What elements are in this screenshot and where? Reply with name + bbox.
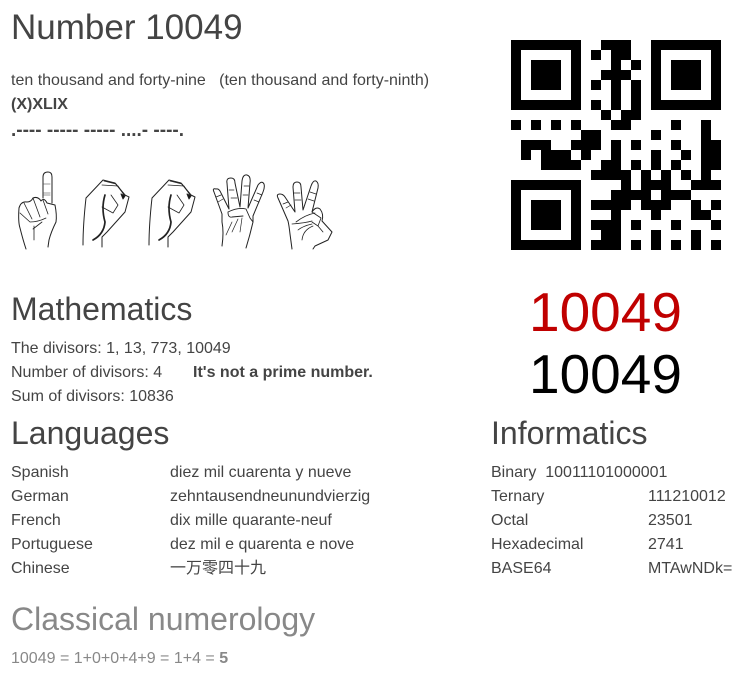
row: Ternary: 111210012 xyxy=(648,488,726,505)
text: sum of divisors: Sum of divisors: 10836 xyxy=(11,388,174,405)
row: Spanish xyxy=(11,464,351,481)
black number: 10049 xyxy=(529,343,682,405)
row: Hexadecimal: 2741 xyxy=(648,536,684,553)
row: French: French xyxy=(11,512,61,529)
row: German xyxy=(11,488,370,505)
row: Binary: Binary 10011101000001 xyxy=(491,464,667,481)
QR finder bottom-left xyxy=(511,180,581,250)
row: Octal: 23501 xyxy=(648,512,692,529)
icon: sign language hands xyxy=(18,172,332,250)
icon: hand digit 3 xyxy=(277,181,332,249)
row: Octal: Octal xyxy=(491,512,528,529)
roman numeral: (X)XLIX xyxy=(11,96,68,113)
row: Chinese: 一万零四十九 xyxy=(170,560,266,577)
icon: hand digit 4 xyxy=(213,175,264,248)
row: BASE64: BASE64 xyxy=(491,560,551,577)
QR code xyxy=(511,40,721,250)
icon: hand digit 0 second xyxy=(149,180,195,247)
red number: 10049 xyxy=(529,281,682,343)
row: German: German xyxy=(11,488,69,505)
text: divisors: The divisors: 1, 13, 773, 10049 xyxy=(11,340,231,357)
text: numerology calculation: 10049 = 1+0+0+4+9 = 1+4 = 5 xyxy=(11,650,228,667)
row: BASE64 xyxy=(491,560,732,577)
row: Portuguese: dez mil e quarenta e nove xyxy=(170,536,354,553)
icon: hand digit 1 xyxy=(19,172,56,249)
heading: Languages: Languages xyxy=(11,415,169,451)
text: prime status: It's not a prime number. xyxy=(193,364,373,381)
QR data modules xyxy=(511,40,721,250)
heading: Classical numerology: Classical numerology xyxy=(11,601,315,637)
text: number of divisors: Number of divisors: 4 xyxy=(11,364,162,381)
icon: hand digit 0 xyxy=(83,180,129,247)
heading: Mathematics: Mathematics xyxy=(11,291,192,327)
morse code: .---- ----- ----- ....- ----. xyxy=(11,120,184,141)
row: Portuguese: Portuguese xyxy=(11,536,93,553)
title: Number 10049 xyxy=(11,8,243,47)
row: BASE64: MTAwNDk= xyxy=(648,560,732,577)
row: French: dix mille quarante-neuf xyxy=(170,512,332,529)
row: French xyxy=(11,512,332,529)
row: Octal xyxy=(491,512,692,529)
row: Ternary xyxy=(491,488,726,505)
row: Hexadecimal xyxy=(491,536,684,553)
row: Spanish: diez mil cuarenta y nueve xyxy=(170,464,351,481)
row: Spanish: Spanish xyxy=(11,464,69,481)
row: Chinese: Chinese xyxy=(11,560,70,577)
row: Chinese xyxy=(11,559,266,577)
heading: Informatics: Informatics xyxy=(491,415,647,451)
QR finder top-left xyxy=(511,40,581,110)
row: Portuguese xyxy=(11,536,354,553)
number in words: ten thousand and forty-nine (ten thousand and forty-ninth) xyxy=(11,72,429,89)
row: Ternary: Ternary xyxy=(491,488,544,505)
row: Hexadecimal: Hexadecimal xyxy=(491,536,583,553)
QR finder top-right xyxy=(651,40,721,110)
row: German: zehntausendneunundvierzig xyxy=(170,488,370,505)
